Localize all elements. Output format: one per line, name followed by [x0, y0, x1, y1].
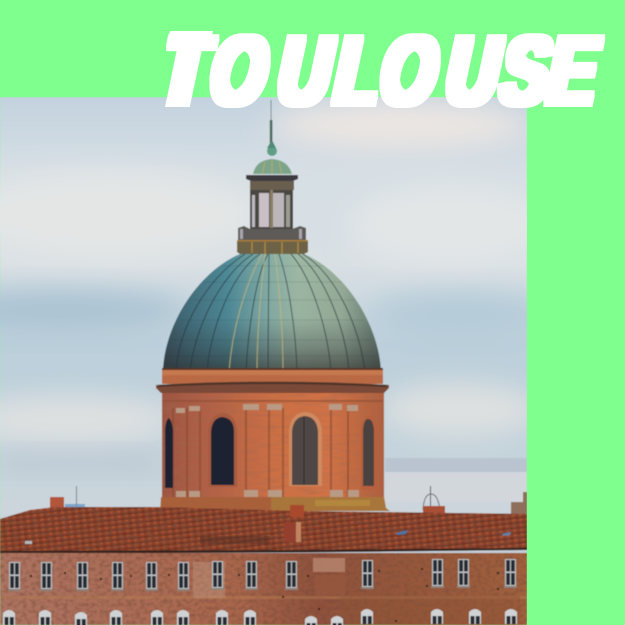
sky — [0, 97, 527, 554]
upper band — [162, 369, 384, 376]
title: TOULOUSE — [154, 17, 609, 125]
lower row of windows — [3, 609, 517, 625]
scaffold holes — [30, 568, 499, 622]
lantern columns — [250, 190, 293, 229]
skylights — [396, 530, 408, 535]
lantern cap — [253, 159, 292, 174]
lantern drum — [237, 240, 308, 254]
cornice — [156, 382, 389, 393]
upper row of windows — [8, 559, 517, 591]
brick drum — [156, 368, 390, 511]
pilasters — [172, 408, 349, 498]
photograph: Dôme de la Grave — [0, 97, 550, 625]
arched windows — [165, 412, 377, 490]
lantern cornice — [246, 175, 298, 181]
dome ribs — [176, 254, 365, 372]
main dome — [163, 254, 381, 372]
pilaster capitals and bases — [176, 404, 359, 498]
spire and finial — [267, 100, 277, 156]
tiled roof — [0, 505, 527, 554]
lantern — [237, 159, 308, 254]
balustrade — [238, 226, 306, 240]
roof chimneys — [284, 522, 296, 542]
drum base — [160, 497, 390, 511]
main wall — [162, 390, 384, 498]
brick wall — [0, 553, 527, 625]
distant finial and chimney — [50, 486, 527, 516]
